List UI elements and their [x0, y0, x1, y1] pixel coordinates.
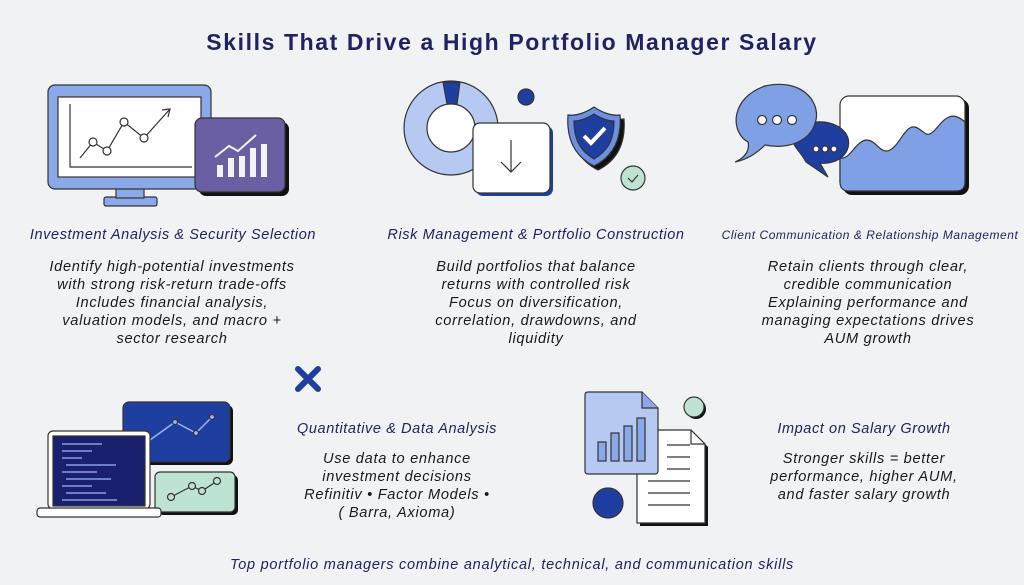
text: quantitative body [304, 451, 490, 521]
footer: Top portfolio managers combine analytical, technical, and communication skills [230, 557, 794, 573]
text: client body: AUM growth [823, 331, 912, 347]
text: investment body: sector research [116, 331, 228, 347]
icon: chat bubbles and area chart [735, 84, 969, 195]
text: risk body: liquidity [509, 331, 564, 347]
text: investment body: Identify high-potential investments [49, 259, 295, 275]
icon: donut, box, shield [404, 81, 645, 196]
text: risk body: Focus on diversification, [449, 295, 623, 311]
icon: documents [585, 392, 708, 526]
text: risk body: correlation, drawdowns, and [435, 313, 637, 329]
text: client body: Explaining performance and [768, 295, 968, 311]
heading: investment analysis: Investment Analysis & Security Selection [30, 227, 316, 243]
text: impact body [769, 451, 958, 503]
text: investment body: Includes financial analysis, [76, 295, 268, 311]
heading: client communication: Client Communication & Relationship Management [722, 228, 1018, 242]
text: investment body: valuation models, and macro + [62, 313, 282, 329]
text: impact body: Stronger skills = better [783, 451, 946, 467]
text: client body [762, 259, 974, 347]
text: investment body [49, 259, 295, 347]
heading: impact: Impact on Salary Growth [777, 421, 951, 437]
text: quantitative body: investment decisions [322, 469, 472, 485]
text: risk body: returns with controlled risk [441, 277, 631, 293]
text: quantitative body: Use data to enhance [323, 451, 471, 467]
text: quantitative body: Refinitiv • Factor Models • [304, 487, 490, 503]
text: quantitative body: ( Barra, Axioma) [339, 505, 455, 521]
text: impact body: performance, higher AUM, [769, 469, 958, 485]
text: client body: managing expectations drives [762, 313, 974, 329]
icon: laptop with charts [37, 402, 238, 517]
heading: quantitative: Quantitative & Data Analysis [297, 421, 497, 437]
text: risk body [435, 259, 637, 347]
text: client body: credible communication [784, 277, 952, 293]
title: Skills That Drive a High Portfolio Manager Salary [206, 29, 818, 55]
heading: risk management: Risk Management & Portfolio Construction [387, 227, 685, 243]
text: impact body: and faster salary growth [778, 487, 950, 503]
icon: monitor with chart [48, 85, 289, 206]
icon: cross [298, 369, 318, 389]
text: investment body: with strong risk-return trade-offs [57, 277, 287, 293]
text: client body: Retain clients through clear, [768, 259, 968, 275]
text: risk body: Build portfolios that balance [436, 259, 636, 275]
